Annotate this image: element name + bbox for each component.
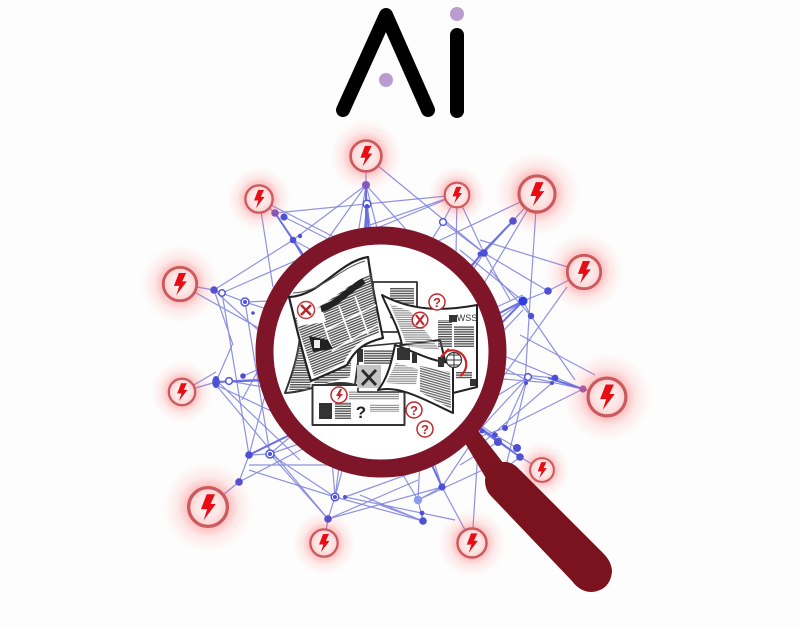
alert node: top (330, 120, 402, 192)
icon: question badge bottom: ? (421, 422, 429, 437)
handle grip (485, 462, 612, 592)
handle neck (462, 428, 504, 480)
network edges (180, 156, 607, 543)
alert node: upper left (227, 167, 291, 231)
network nodes (210, 181, 587, 525)
back newspaper (373, 282, 417, 332)
center newspaper with X (357, 343, 405, 392)
thick network edges (216, 185, 583, 487)
alert node: left lower (151, 361, 213, 423)
icon: question badge upper (429, 294, 445, 310)
alert node: right upper (545, 233, 623, 311)
alert node: left upper (141, 245, 219, 323)
bottom newspaper (312, 385, 404, 425)
front right newspaper (378, 345, 453, 413)
alert node: lower right small (514, 442, 570, 498)
icon: globe with red arc (441, 349, 466, 376)
question mark: ? (356, 403, 366, 422)
alert node: upper right (495, 152, 579, 236)
icon: question badge upper: ? (433, 295, 441, 310)
icon: bolt badge (331, 387, 347, 403)
right newspaper (382, 295, 477, 393)
alert node: bottom left (292, 511, 356, 575)
icon: question badge bottom (417, 421, 433, 437)
alert node: bottom right (438, 509, 506, 577)
top left newspaper (289, 257, 383, 381)
lens (264, 236, 498, 468)
newspaper collage (285, 257, 477, 437)
alert node: right lower (563, 353, 651, 441)
icon: X badge right (412, 312, 428, 328)
left lower newspaper (285, 332, 362, 393)
icon: question badge lower (406, 402, 422, 418)
alert node: lower left large (163, 462, 253, 552)
logo: Ai mark (343, 7, 464, 111)
alert node: upper middle right (428, 166, 486, 224)
magnifying glass (264, 236, 612, 592)
masthead label: WSS (457, 313, 477, 323)
icon: red X badge (298, 302, 314, 318)
icon: question badge lower: ? (410, 403, 418, 418)
